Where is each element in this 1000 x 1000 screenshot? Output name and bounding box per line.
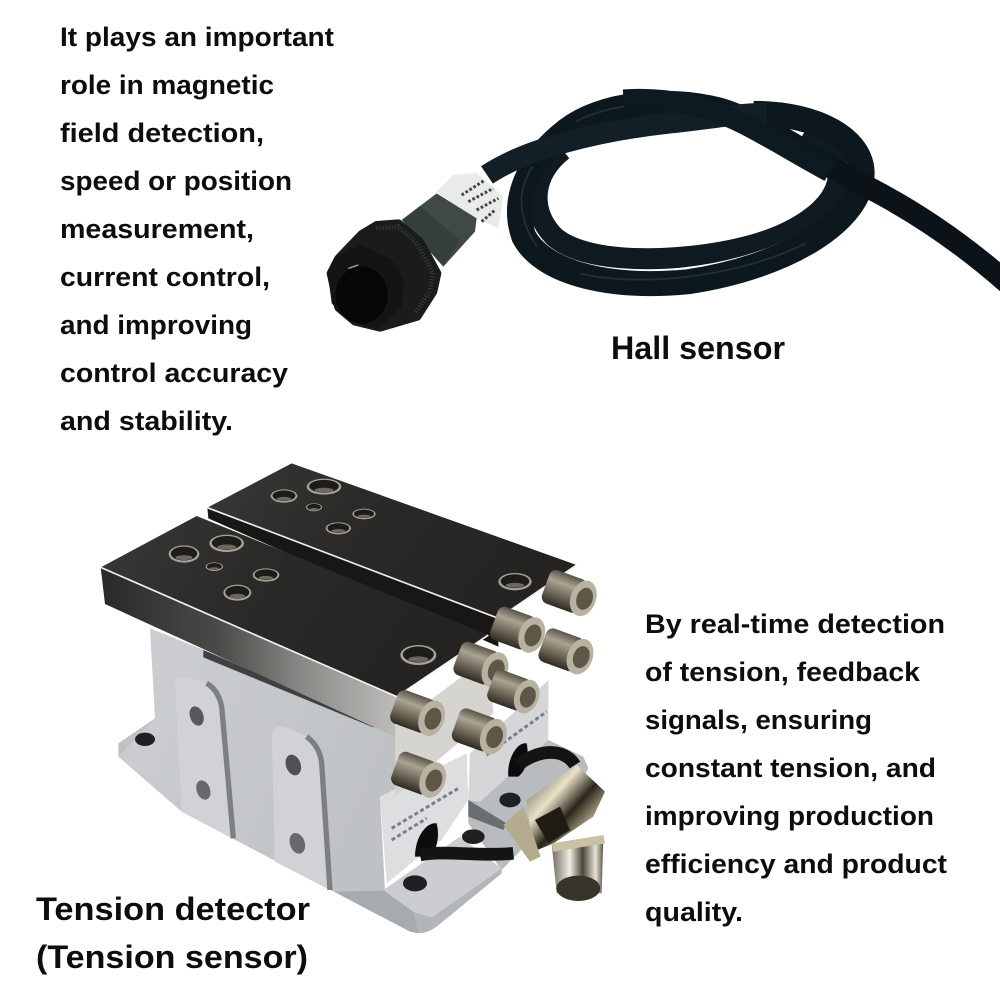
text block: Hall sensor description [60, 22, 334, 436]
cable exit strand [830, 167, 1000, 285]
text block: Hall sensor description: measurement, [60, 214, 254, 244]
sensor lens [336, 266, 388, 324]
text block: tension detector description: improving production [645, 801, 934, 831]
top strand over [624, 99, 830, 172]
photo: Hall sensor body [329, 173, 503, 328]
base left lug [118, 718, 158, 780]
rear plate [207, 463, 577, 618]
cable highlights [521, 104, 806, 280]
threaded barrel [402, 193, 477, 267]
front plate [101, 516, 488, 697]
front plate front edge [101, 567, 397, 737]
label print on side [392, 712, 547, 840]
text block: tension detector description: efficiency and product [645, 849, 947, 879]
text block: tension detector description: constant tension, and [645, 753, 936, 783]
cable strand to sensor [487, 113, 767, 175]
base top right [383, 837, 502, 917]
rear bolts [488, 567, 602, 678]
mounting tab left [175, 677, 233, 838]
text block: Hall sensor description: It plays an important [60, 22, 334, 52]
rear base shadow wall [468, 800, 507, 830]
front body [118, 628, 395, 892]
photo: tension detector [101, 463, 605, 933]
lens highlight [348, 265, 358, 268]
text block: tension detector description [645, 609, 947, 927]
text block: Hall sensor description: role in magnetic [60, 70, 274, 100]
inner cable loop [537, 130, 838, 259]
metal connector [503, 765, 605, 901]
cable openings [415, 743, 528, 857]
sensor label band [437, 173, 503, 228]
outer cable loop [520, 103, 862, 284]
base front lip [182, 812, 418, 933]
text block: tension detector description: quality. [645, 897, 743, 927]
heading: Tension detector: (Tension sensor) [36, 939, 308, 975]
text block: Hall sensor description: current control, [60, 262, 270, 292]
front bolts [388, 639, 544, 802]
heading: Tension detector: Tension detector [36, 891, 310, 927]
nut knurling [377, 227, 433, 314]
text block: Hall sensor description: speed or position [60, 166, 292, 196]
text block: tension detector description: signals, ensuring [645, 705, 872, 735]
text block: Hall sensor description: and improving [60, 310, 252, 340]
knurled nut [331, 223, 437, 328]
rear unit side [468, 680, 548, 802]
text block: Hall sensor description: field detection, [60, 118, 264, 148]
base mounting holes [135, 733, 521, 891]
text block: tension detector description: By real-time detection [645, 609, 945, 639]
text block: tension detector description: of tension, feedback [645, 657, 921, 687]
front plate holes [169, 535, 436, 665]
black sensor cables [420, 752, 575, 855]
mounting tab right [272, 726, 330, 890]
front plate white edges [101, 567, 488, 697]
text block: Hall sensor description: and stability. [60, 406, 233, 436]
heading: Tension detector [36, 891, 310, 975]
rear plate front edge [207, 508, 498, 647]
side of front unit [380, 753, 468, 883]
sensor face hex [329, 246, 402, 328]
rear plate holes [271, 479, 532, 590]
base corner face [413, 868, 502, 933]
rear base [468, 740, 588, 870]
rear plate white edges [207, 508, 577, 618]
white gap in coil [624, 193, 850, 271]
heading: Hall sensor: Hall sensor [611, 330, 785, 366]
photo: Hall sensor cable [487, 99, 1000, 285]
label marks [462, 180, 498, 222]
front unit end face [395, 657, 493, 797]
barrel shading [402, 206, 460, 267]
text block: Hall sensor description: control accuracy [60, 358, 288, 388]
plate gap shadow [203, 650, 373, 727]
